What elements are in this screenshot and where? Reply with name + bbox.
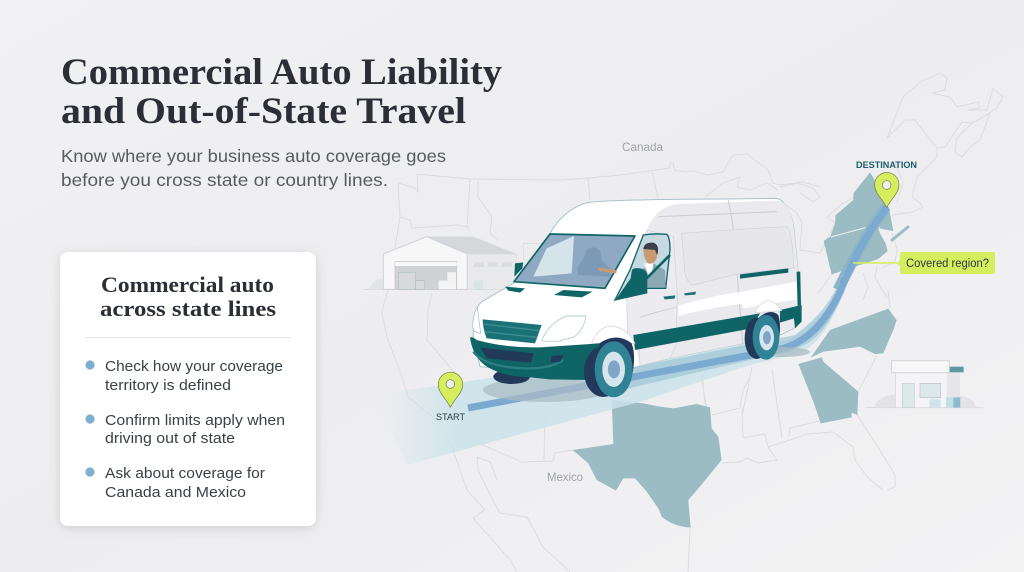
- front wheel: [584, 337, 634, 397]
- driver: [600, 243, 670, 287]
- bullet: Canada and Mexico: Canada and Mexico: [105, 484, 246, 501]
- bullet: Canada and Mexico: Ask about coverage for: [105, 465, 265, 482]
- label: start: START: [436, 412, 466, 422]
- route line halo: [838, 207, 886, 290]
- bullet: territory: territory is defined: [105, 377, 231, 394]
- wheel arches: [592, 301, 782, 343]
- title: Commercial Auto Liability: [61, 52, 503, 93]
- icon: start pin: [438, 372, 463, 407]
- bullet: territory: Check how your coverage: [105, 358, 283, 375]
- icon: destination pin: [875, 172, 899, 208]
- state: Texas: [573, 400, 722, 528]
- van shadow: [483, 347, 810, 402]
- windshield: [514, 234, 635, 288]
- silhouette: [577, 248, 610, 277]
- grille: [483, 319, 542, 343]
- subtitle: Know where your business auto coverage goes: [61, 146, 446, 166]
- panel: commercial auto across state lines: [60, 252, 316, 526]
- state border line: [831, 225, 880, 237]
- label: Mexico: Mexico: [547, 470, 583, 484]
- callout: covered region: [853, 252, 995, 274]
- headlight left: [473, 307, 481, 333]
- label: Canada: Canada: [622, 140, 663, 154]
- state: North Carolina: [811, 309, 897, 358]
- label: destination: DESTINATION: [856, 160, 917, 171]
- van: [470, 198, 802, 397]
- door handles: [663, 292, 696, 299]
- white swoosh: [678, 282, 797, 316]
- hood vents: [505, 287, 593, 297]
- bullet: limits: [85, 412, 285, 447]
- bullet: Canada and Mexico: [85, 465, 265, 501]
- state: New York and Pennsylvania: [824, 172, 893, 274]
- icon: warehouse: [363, 237, 543, 289]
- side window: [615, 234, 670, 300]
- lower stripe: [633, 305, 802, 350]
- left mirror: [514, 262, 523, 277]
- callout: covered region: Covered region?: [906, 258, 989, 270]
- rear wheel: [745, 312, 780, 360]
- route line: [468, 207, 887, 408]
- upper stripe: [740, 268, 801, 306]
- bullet: limits: Confirm limits apply when: [105, 412, 285, 429]
- windshield reflection: [533, 236, 574, 277]
- map: north america outlines: [382, 73, 1003, 572]
- door panel: [627, 230, 677, 366]
- card background: [60, 252, 316, 526]
- rear door seam: [728, 200, 743, 343]
- front axle: [493, 369, 530, 384]
- icon: storefront: [865, 361, 983, 408]
- bullet: territory: [85, 358, 283, 394]
- rear window panel: [682, 227, 794, 285]
- card heading: across state lines: [100, 296, 276, 321]
- bumper: [470, 337, 600, 380]
- highlighted states: [573, 172, 908, 528]
- title: and Out-of-State Travel: [61, 91, 466, 132]
- roof line: [658, 212, 777, 217]
- headlight right: [542, 316, 586, 342]
- card heading: Commercial auto: [101, 272, 274, 297]
- mirror: [615, 268, 647, 301]
- state: Georgia: [798, 357, 858, 423]
- route beam: [373, 272, 850, 465]
- side panel: [625, 201, 801, 366]
- long island: [892, 227, 908, 240]
- title: [61, 52, 503, 132]
- subtitle: before you cross state or country lines.: [61, 170, 388, 190]
- bullet: limits: driving out of state: [105, 430, 235, 447]
- card heading: [100, 272, 276, 321]
- subtitle: [61, 146, 446, 190]
- van body: [473, 198, 801, 377]
